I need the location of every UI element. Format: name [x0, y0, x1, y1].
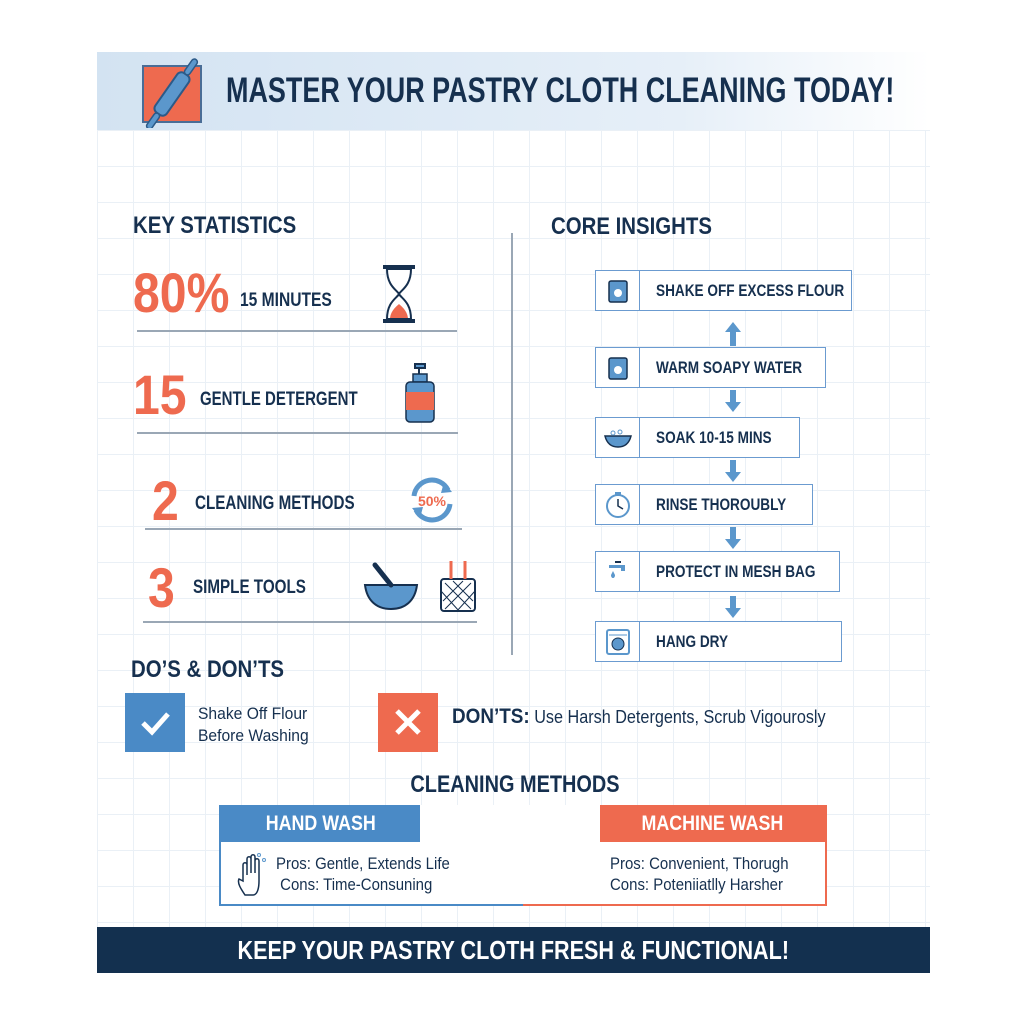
heading: core insights: CORE INSIGHTS [551, 213, 712, 240]
flow step 1: SHAKE OFF EXCESS FLOUR [656, 280, 844, 300]
footer banner: KEEP YOUR PASTRY CLOTH FRESH & FUNCTIONAL! [238, 935, 789, 965]
stat 4: SIMPLE TOOLS [193, 577, 306, 598]
flow step 2: WARM SOAPY WATER [656, 358, 802, 376]
hand wash text: Pros: Gentle, Extends Life [276, 854, 450, 873]
hand wash header [221, 805, 420, 842]
arrow down [725, 527, 741, 549]
icon: detergent bottle [405, 363, 435, 423]
flow step 4: RINSE THOROUBLY [656, 494, 786, 514]
title: MASTER YOUR PASTRY CLOTH CLEANING TODAY! [226, 71, 894, 110]
flow step 6 [595, 621, 842, 662]
header banner [97, 52, 930, 130]
stat 4: 3 [148, 556, 175, 619]
do box: Before Washing [198, 726, 309, 745]
flow step 3: SOAK 10-15 MINS [656, 428, 772, 446]
stat 1: 15 MINUTES [240, 290, 332, 311]
do box [125, 693, 309, 752]
machine wash text: Cons: Poteniiatlly Harsher [610, 875, 783, 894]
don't box [378, 693, 826, 752]
heading: cleaning methods: CLEANING METHODS [410, 771, 620, 798]
icon: bowl and basket [364, 561, 476, 612]
flow step 6: HANG DRY [656, 632, 728, 650]
stat 2: GENTLE DETERGENT [200, 389, 358, 410]
hand wash text: Cons: Time-Consuning [280, 875, 432, 894]
hand wash header: HAND WASH [265, 812, 376, 835]
icon: hourglass [383, 265, 415, 323]
stat 2 [133, 363, 435, 426]
flow step 3 [595, 417, 800, 458]
flow step 2 [595, 347, 826, 388]
stat 1: 80% [133, 261, 229, 324]
flow step 1 [595, 270, 852, 311]
hand wash text [276, 854, 450, 894]
methods panel [219, 805, 827, 906]
stat 3: CLEANING METHODS [195, 493, 355, 514]
icon: cycle 50%: 50% [418, 493, 447, 509]
do box: Shake Off Flour [198, 704, 307, 723]
flow step 5 [595, 551, 840, 592]
stat 2: 15 [133, 363, 187, 426]
icon: check [125, 693, 185, 752]
machine wash text [610, 854, 789, 894]
stat 1 [133, 261, 415, 324]
arrow down [725, 390, 741, 412]
stat 3 [152, 469, 452, 532]
machine wash text: Pros: Convenient, Thorugh [610, 854, 789, 873]
flow step 5: PROTECT IN MESH BAG [656, 562, 815, 580]
stat 3: 2 [152, 469, 179, 532]
vertical divider [511, 233, 513, 655]
machine wash header: MACHINE WASH [642, 812, 783, 835]
arrow down [725, 460, 741, 482]
don't box: DON’TS: Use Harsh Detergents, Scrub Vigourosly [452, 705, 826, 728]
arrow down [725, 596, 741, 618]
icon: cross [378, 693, 438, 752]
icon: hand [238, 853, 266, 896]
flow step 4 [595, 484, 813, 525]
heading: key statistics: KEY STATISTICS [133, 212, 296, 239]
footer banner [97, 927, 930, 973]
machine wash header [600, 805, 825, 842]
icon: cycle 50% [412, 478, 452, 522]
heading: do's and don'ts: DO’S & DON’TS [131, 656, 284, 683]
icon: rolling pin [142, 58, 202, 128]
stat 4 [148, 556, 476, 619]
arrow up [725, 322, 741, 346]
